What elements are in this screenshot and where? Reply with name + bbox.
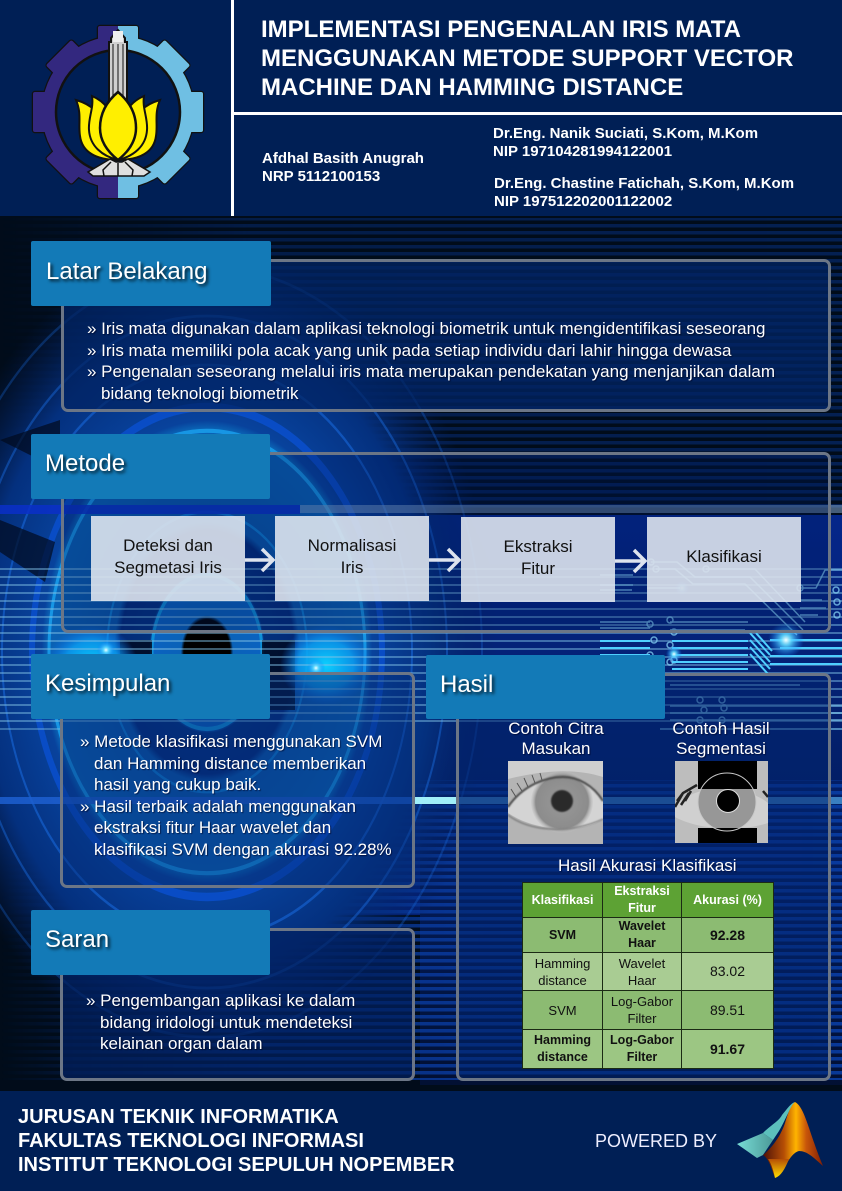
table header bbox=[523, 883, 773, 1068]
title: MACHINE DAN HAMMING DISTANCE bbox=[261, 74, 683, 101]
title: MENGGUNAKAN METODE SUPPORT VECTOR bbox=[261, 45, 794, 72]
caption: Contoh Citra Masukan bbox=[508, 719, 605, 758]
heading: Latar Belakang bbox=[31, 241, 271, 306]
heading: Saran: Saran bbox=[45, 926, 109, 953]
text: Kesimpulan bullets bbox=[80, 732, 392, 860]
panel: Kesimpulan bbox=[60, 672, 415, 888]
panel: Hasil bbox=[456, 673, 831, 1081]
title: IMPLEMENTASI PENGENALAN IRIS MATA bbox=[261, 16, 741, 43]
row: Hamming Wavelet Haar bbox=[522, 952, 774, 990]
text: Latar Belakang bullets bbox=[87, 319, 776, 404]
text: Latar Belakang bullets: bidang teknologi biometrik bbox=[101, 384, 299, 403]
text: Saran bullet: » Pengembangan aplikasi ke dalam bbox=[86, 991, 355, 1010]
step: Normalisasi Iris bbox=[275, 516, 429, 601]
footer institution text: INSTITUT TEKNOLOGI SEPULUH NOPEMBER bbox=[18, 1154, 455, 1176]
header band bbox=[0, 0, 842, 216]
heading: Metode bbox=[31, 434, 270, 499]
step: Ekstraksi Fitur: Fitur bbox=[521, 558, 555, 578]
row: SVM Wavelet Haar: Haar bbox=[628, 936, 656, 950]
author: NRP 5112100153 bbox=[262, 168, 380, 185]
heading: Hasil bbox=[426, 655, 665, 719]
supervisor 1 bbox=[493, 125, 758, 160]
row: Hamming Wavelet Haar: distance bbox=[538, 972, 587, 988]
text: Latar Belakang bullets: » Iris mata memiliki pola acak yang unik pada setiap individu dari lahir hingga dewasa bbox=[87, 341, 731, 360]
footer institution text: JURUSAN TEKNIK INFORMATIKA bbox=[18, 1106, 339, 1128]
footer band bbox=[0, 1091, 842, 1191]
heading: Kesimpulan: Kesimpulan bbox=[45, 670, 170, 697]
row: Hamming Log-Gabor: 91.67 bbox=[710, 1040, 745, 1056]
heading: Latar Belakang: Latar Belakang bbox=[46, 258, 207, 285]
caption: Hasil Akurasi Klasifikasi: Hasil Akurasi Klasifikasi bbox=[558, 856, 737, 875]
powered by label: POWERED BY bbox=[595, 1131, 717, 1151]
step: Klasifikasi bbox=[647, 517, 801, 602]
footer institution text bbox=[18, 1106, 455, 1176]
footer institution text: FAKULTAS TEKNOLOGI INFORMASI bbox=[18, 1130, 364, 1152]
table: accuracy results bbox=[522, 882, 774, 1069]
caption: Contoh Hasil Segmentasi: Segmentasi bbox=[676, 739, 766, 758]
step: Deteksi dan Segmetasi Iris bbox=[91, 516, 245, 601]
arrow: step 3 to 4 bbox=[615, 548, 647, 574]
row: SVM Wavelet Haar bbox=[522, 918, 774, 952]
row: SVM Log-Gabor: SVM bbox=[548, 1002, 577, 1018]
supervisor 1: Dr.Eng. Nanik Suciati, S.Kom, M.Kom bbox=[493, 125, 758, 142]
header divider: horizontal bbox=[234, 112, 842, 115]
row: Hamming Log-Gabor: Hamming bbox=[534, 1033, 591, 1047]
table header: Ekstraksi bbox=[614, 884, 670, 898]
row: Hamming Log-Gabor: distance bbox=[537, 1050, 588, 1064]
caption: Contoh Hasil Segmentasi bbox=[672, 719, 770, 759]
header divider: vertical bbox=[231, 0, 234, 216]
row: Hamming Wavelet Haar: 83.02 bbox=[710, 963, 745, 979]
row: SVM Log-Gabor: 89.51 bbox=[710, 1002, 745, 1018]
step: Normalisasi Iris: Iris bbox=[341, 558, 363, 577]
text: Kesimpulan bullets: dan Hamming distance memberikan bbox=[94, 754, 366, 773]
table header: Klasifikasi bbox=[532, 892, 593, 906]
row: SVM Log-Gabor: Filter bbox=[628, 1011, 656, 1026]
panel: Saran bbox=[60, 928, 415, 1081]
heading: Metode: Metode bbox=[45, 450, 125, 477]
step: Ekstraksi Fitur bbox=[461, 517, 615, 602]
row: Hamming Log-Gabor: Filter bbox=[627, 1050, 657, 1064]
row: SVM Wavelet Haar: 92.28 bbox=[710, 926, 745, 942]
row: SVM Wavelet Haar: SVM bbox=[549, 928, 576, 942]
heading: Hasil: Hasil bbox=[440, 671, 493, 698]
text: Latar Belakang bullets: » Iris mata digunakan dalam aplikasi teknologi biometrik untuk mengidentifikasi seseorang bbox=[87, 319, 765, 338]
supervisor 2: NIP 197512202001122002 bbox=[494, 193, 672, 210]
arrow: step 1 to 2 bbox=[245, 548, 276, 572]
supervisor 2 bbox=[494, 175, 794, 210]
step: Klasifikasi: Klasifikasi bbox=[686, 547, 762, 566]
step: Deteksi dan Segmetasi Iris: Segmetasi Iris bbox=[114, 558, 222, 577]
row: Hamming Wavelet Haar: Hamming bbox=[535, 956, 590, 970]
heading: Kesimpulan bbox=[31, 654, 270, 719]
text: Kesimpulan bullets: ekstraksi fitur Haar wavelet dan bbox=[94, 818, 331, 837]
step: Deteksi dan Segmetasi Iris: Deteksi dan bbox=[123, 536, 213, 555]
icon: ITS logo gear with monument and lotus bbox=[32, 24, 204, 200]
caption: Contoh Citra Masukan: Contoh Citra bbox=[508, 719, 604, 738]
panel: Latar Belakang bbox=[61, 259, 831, 412]
arrow: step 2 to 3 bbox=[429, 548, 461, 572]
text: Saran bullet bbox=[86, 991, 356, 1054]
text: Kesimpulan bullets: » Metode klasifikasi menggunakan SVM bbox=[80, 732, 382, 751]
row: SVM Log-Gabor: Log-Gabor bbox=[611, 994, 673, 1009]
step: Ekstraksi Fitur: Ekstraksi bbox=[504, 536, 572, 556]
row: Hamming Wavelet Haar: Haar bbox=[628, 972, 656, 988]
supervisor 2: Dr.Eng. Chastine Fatichah, S.Kom, M.Kom bbox=[494, 175, 794, 192]
row: Hamming Log-Gabor: Log-Gabor bbox=[610, 1033, 674, 1047]
caption: Contoh Citra Masukan: Masukan bbox=[522, 739, 590, 758]
row: SVM Log-Gabor bbox=[522, 990, 774, 1030]
panel: Metode bbox=[61, 452, 831, 633]
author: Afdhal Basith Anugrah bbox=[262, 150, 424, 167]
text: Saran bullet: kelainan organ dalam bbox=[100, 1034, 263, 1053]
icon: MATLAB membrane logo bbox=[737, 1102, 823, 1178]
caption: Contoh Hasil Segmentasi: Contoh Hasil bbox=[672, 719, 770, 738]
text: Latar Belakang bullets: » Pengenalan seseorang melalui iris mata merupakan pendekatan yang menjanjikan dalam bbox=[87, 362, 775, 381]
table header: Akurasi (%) bbox=[693, 892, 762, 906]
text: Kesimpulan bullets: hasil yang cukup baik. bbox=[94, 775, 261, 794]
row: SVM Wavelet Haar: Wavelet bbox=[619, 919, 665, 933]
table header: Fitur bbox=[628, 901, 656, 915]
image: segmented eye bbox=[675, 761, 768, 843]
step: Normalisasi Iris: Normalisasi bbox=[308, 536, 396, 555]
text: Saran bullet: bidang iridologi untuk mendeteksi bbox=[100, 1013, 352, 1032]
background: technology iris and circuit artwork bbox=[0, 218, 842, 1085]
title bbox=[261, 16, 794, 101]
image: input eye bbox=[508, 761, 603, 844]
text: Kesimpulan bullets: » Hasil terbaik adalah menggunakan bbox=[80, 797, 356, 816]
heading: Saran bbox=[31, 910, 270, 975]
supervisor 1: NIP 197104281994122001 bbox=[493, 143, 672, 160]
text: Kesimpulan bullets: klasifikasi SVM dengan akurasi 92.28% bbox=[94, 840, 392, 859]
row: Hamming Wavelet Haar: Wavelet bbox=[619, 956, 665, 970]
author bbox=[262, 150, 424, 185]
row: Hamming Log-Gabor bbox=[522, 1030, 774, 1068]
